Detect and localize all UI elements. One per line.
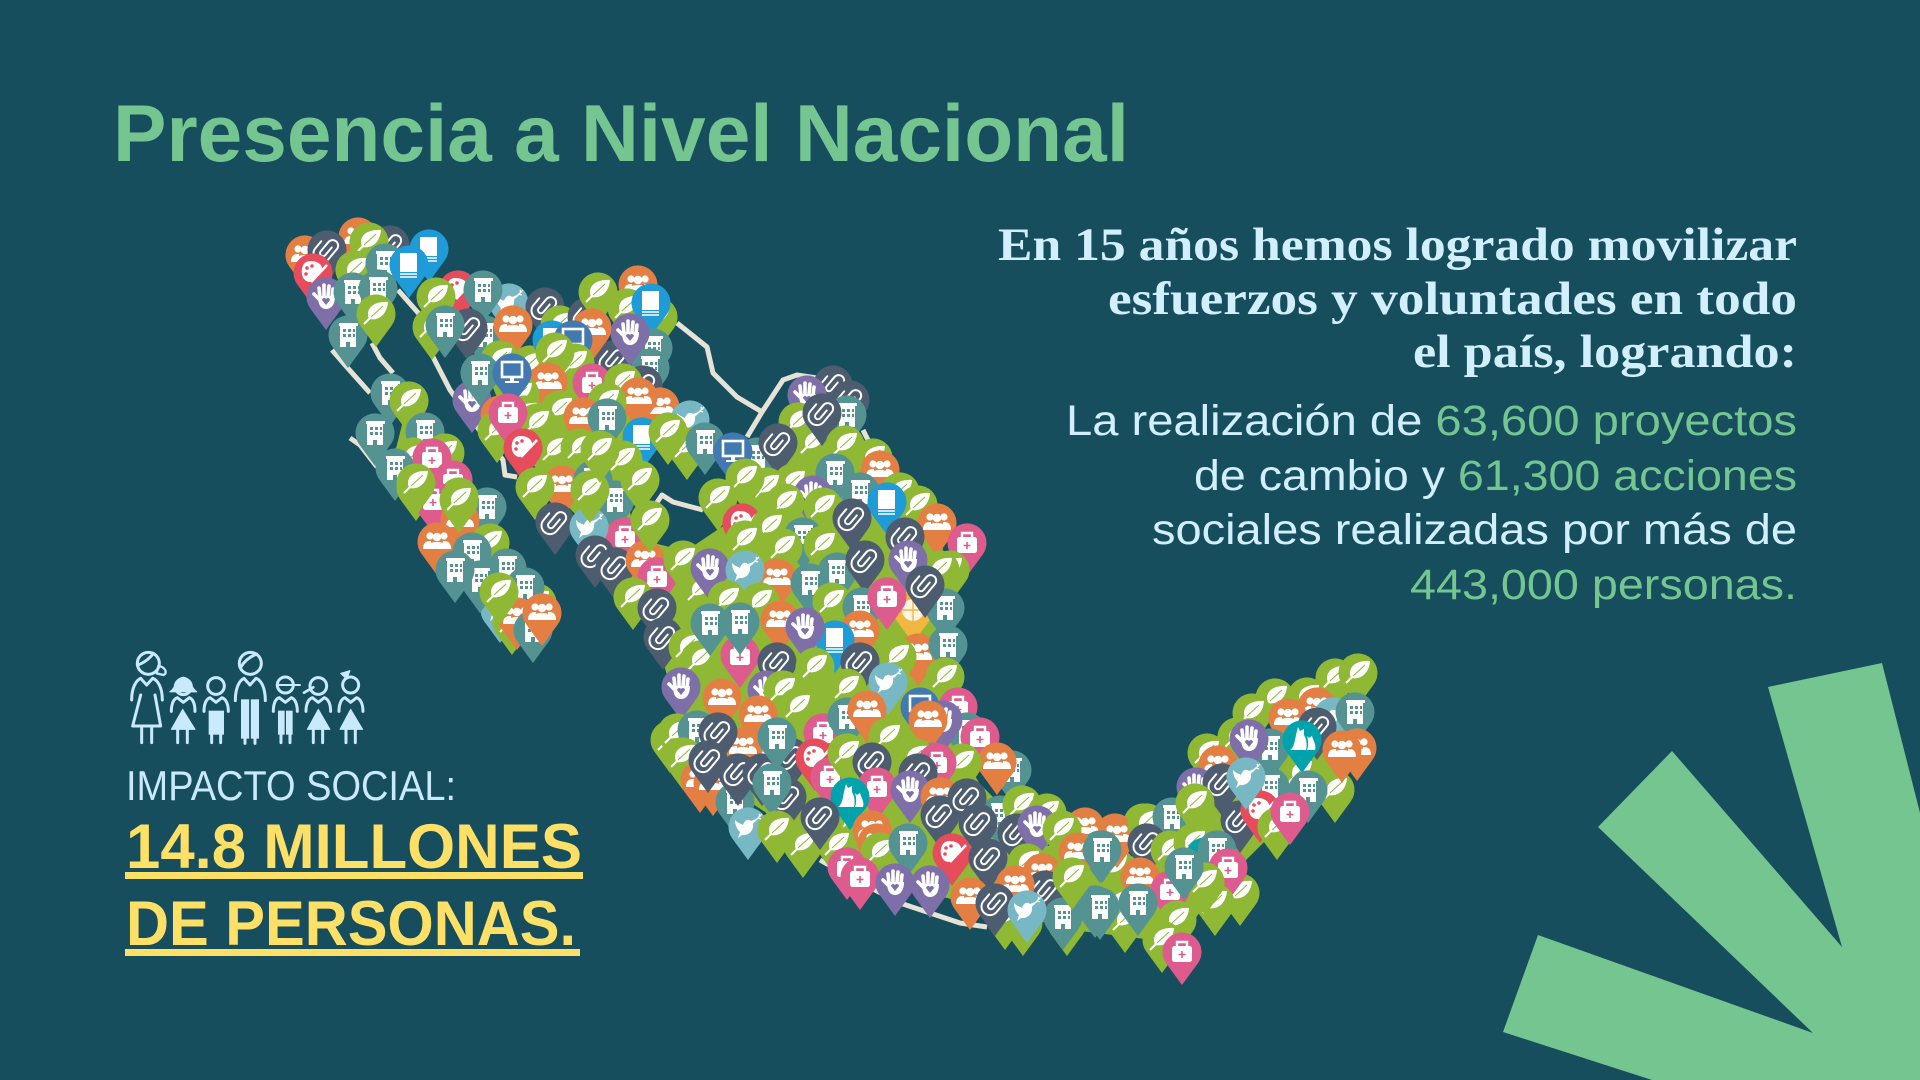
icon: family of seven figures: [132, 652, 363, 743]
results paragraph: de cambio y 61,300 acciones: [1194, 452, 1797, 500]
intro paragraph: el país, logrando:: [1413, 326, 1797, 378]
results paragraph: La realización de 63,600 proyectos: [1066, 397, 1797, 445]
impact figure: 14.8 MILLONES: [126, 812, 582, 882]
icon: mother: [132, 652, 166, 743]
results paragraph: [1066, 397, 1797, 609]
icon: boy with round head: [204, 678, 228, 743]
title: Presencia a Nivel Nacional: [113, 89, 1129, 179]
results paragraph: sociales realizadas por más de: [1152, 506, 1797, 554]
icon: girl with hat: [170, 677, 197, 743]
pins: back layer: [286, 217, 724, 663]
results paragraph: 443,000 personas.: [1410, 561, 1797, 609]
map interior fill under pins: [392, 367, 1335, 943]
icon: boy with cap: [273, 677, 300, 743]
intro paragraph: esfuerzos y voluntades en todo: [1108, 273, 1797, 325]
pins: Yucatan peninsula layer: [1080, 653, 1378, 985]
pins: central and eastern layer: [638, 365, 1162, 956]
icon: father: [235, 652, 265, 743]
impact label: IMPACTO SOCIAL:: [126, 762, 456, 809]
decorative star rays, bottom right: [1503, 663, 1920, 1080]
map outline: borders and coasts: [332, 290, 987, 927]
impact figure: [125, 812, 583, 959]
intro paragraph: En 15 años hemos logrado movilizar: [998, 219, 1797, 271]
icon: girl with bow: [339, 671, 363, 743]
intro paragraph: [998, 219, 1797, 378]
icon: girl with ponytail: [304, 678, 331, 743]
impact figure: DE PERSONAS.: [126, 889, 576, 959]
map of Mexico covered in project pins: [286, 217, 1378, 985]
